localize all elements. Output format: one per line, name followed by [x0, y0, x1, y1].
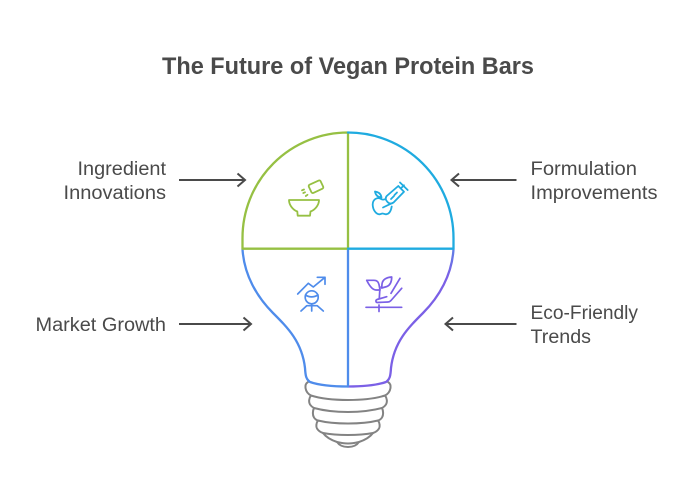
icon: apple with syringe — [373, 182, 408, 214]
quadrant: lower right (purple) — [348, 249, 454, 386]
label: Eco-Friendly Trends — [530, 303, 638, 348]
label: Ingredient Innovations: Ingredient — [78, 159, 167, 180]
bulb screw base — [305, 382, 391, 447]
arrow: Formulation Improvements — [452, 174, 516, 186]
label: Eco-Friendly Trends: Trends — [530, 327, 591, 348]
lightbulb — [242, 132, 454, 447]
arrow: Market Growth — [179, 318, 251, 330]
label: Market Growth: Market Growth — [36, 315, 166, 336]
label: Formulation Improvements: Improvements — [530, 183, 658, 204]
label: Ingredient Innovations: Innovations — [64, 183, 166, 204]
label: Eco-Friendly Trends: Eco-Friendly — [530, 303, 638, 324]
arrow: Eco-Friendly Trends — [446, 318, 516, 330]
icon: person with growth arrow — [298, 277, 325, 311]
icon: bowl with shaker — [289, 180, 324, 216]
quadrant: upper left (green) — [242, 132, 348, 249]
quadrant: lower left (blue) — [242, 249, 348, 386]
label: Ingredient Innovations — [64, 159, 167, 204]
center divider: lower — [347, 249, 349, 386]
quadrant: upper right (cyan) — [348, 132, 454, 249]
label: Formulation Improvements: Formulation — [530, 159, 637, 180]
label: Formulation Improvements — [530, 159, 658, 204]
arrow: Ingredient Innovations — [179, 174, 245, 186]
icon: plant in hand — [366, 277, 402, 312]
title: The Future of Vegan Protein Bars — [162, 53, 534, 80]
